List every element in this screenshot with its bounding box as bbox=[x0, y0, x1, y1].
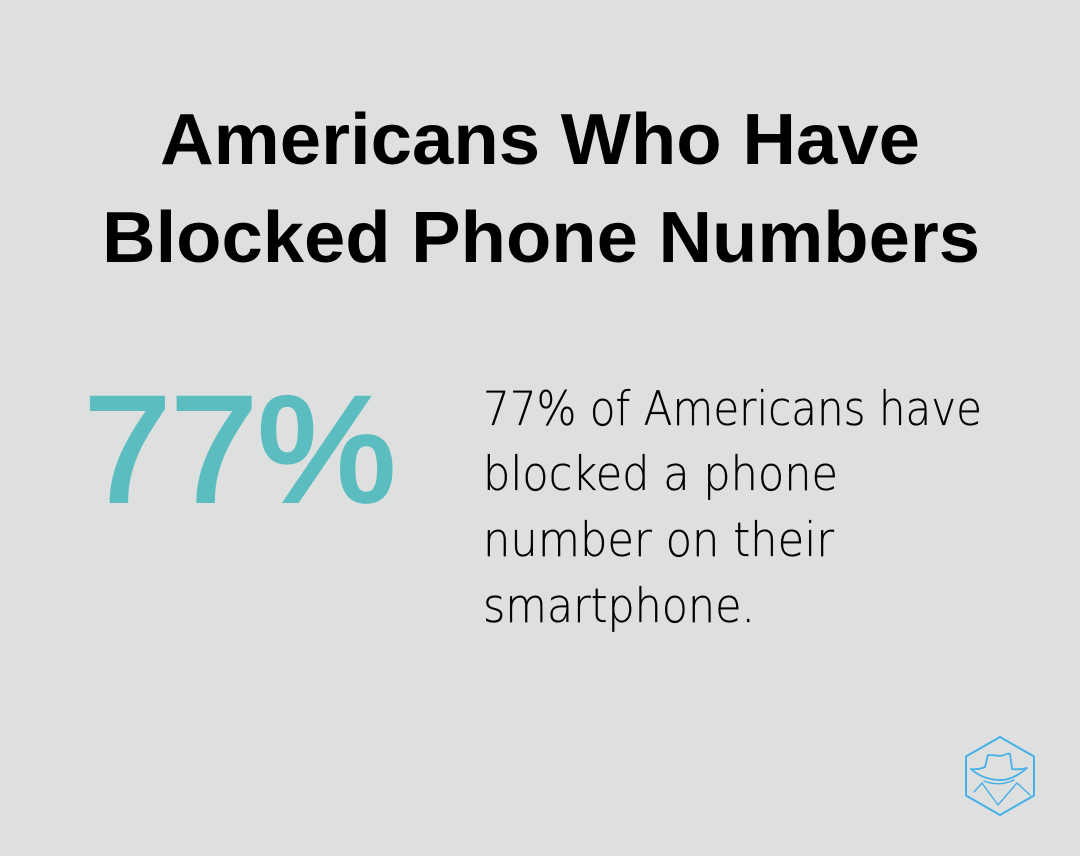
description text bbox=[483, 382, 982, 634]
icon: hexagon spy logo bbox=[966, 737, 1034, 815]
title bbox=[102, 100, 980, 278]
title: Blocked Phone Numbers bbox=[102, 198, 980, 278]
description text: smartphone. bbox=[483, 579, 755, 634]
description text: 77% of Americans have bbox=[483, 382, 982, 437]
title: Americans Who Have bbox=[160, 100, 920, 180]
description text: blocked a phone bbox=[483, 447, 838, 502]
description text: number on their bbox=[483, 513, 835, 568]
big statistic: 77%: 77% bbox=[84, 365, 396, 533]
